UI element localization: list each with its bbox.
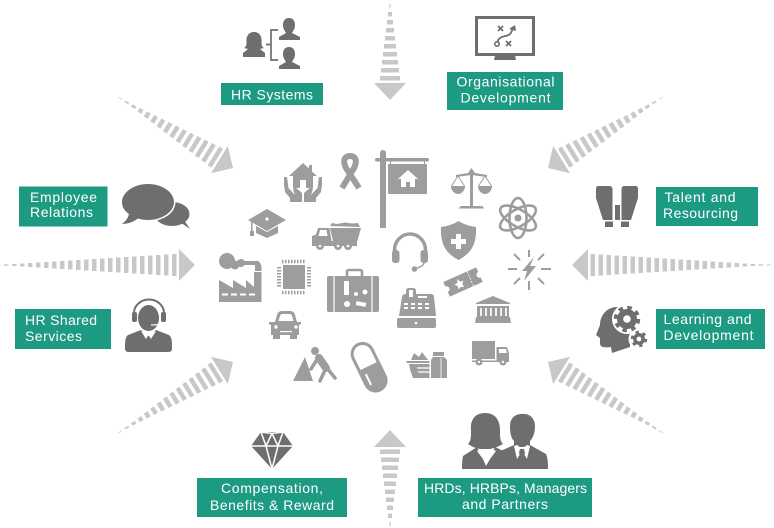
arrow: from right	[572, 249, 771, 281]
label: Talent and Resourcing: Talent and	[664, 189, 736, 205]
icon: HR systems organisation people	[243, 18, 300, 69]
arrow: from left	[0, 249, 195, 281]
icon: property sign	[375, 150, 429, 228]
label: Compensation, Benefits & Reward: Benefits & Reward	[210, 497, 334, 513]
icon: binoculars	[596, 186, 638, 227]
icon: suitcase with stickers	[327, 270, 379, 312]
icon: road worker digging	[293, 347, 335, 381]
icon: graduation cap	[248, 209, 286, 238]
label: Talent and Resourcing: Resourcing	[663, 205, 738, 221]
icon: factory	[219, 253, 262, 302]
label: Employee Relations: Employee	[30, 189, 97, 205]
icon: lightning spark	[508, 250, 551, 290]
label: Learning and Development	[656, 309, 765, 349]
arrow: from bottom right	[540, 348, 671, 447]
icon: speech bubbles	[120, 182, 190, 229]
icon: dump truck	[312, 222, 361, 250]
label: Learning and Development: Development	[664, 327, 754, 343]
arrow: from top left	[110, 83, 241, 182]
icon: hands holding house	[284, 163, 322, 202]
label: HRDs, HRBPs, Managers and Partners: and Partners	[462, 496, 548, 512]
label: Employee Relations: Relations	[30, 204, 93, 220]
label: HRDs, HRBPs, Managers and Partners	[418, 478, 592, 517]
label: HR Systems: HR Systems	[231, 86, 313, 102]
label: HRDs, HRBPs, Managers and Partners: HRDs, HRBPs, Managers	[424, 480, 587, 496]
icon: shopping basket and carton	[406, 352, 447, 378]
icon: call centre agent	[125, 300, 172, 352]
icon: strategy on monitor	[475, 18, 535, 60]
label: Learning and Development: Learning and	[664, 311, 752, 327]
label: HR Systems	[221, 83, 323, 105]
label: Organisational Development: Development	[460, 90, 551, 106]
icon: ticket	[443, 267, 483, 297]
label: Organisational Development	[447, 72, 563, 110]
label: Compensation, Benefits & Reward	[197, 478, 347, 517]
arrow: from bottom	[374, 430, 406, 526]
label: HR Shared Services: HR Shared	[25, 312, 97, 328]
icon: scales of justice	[451, 168, 492, 208]
label: Compensation, Benefits & Reward: Compensation,	[221, 480, 323, 496]
label: HR Shared Services: Services	[25, 328, 82, 344]
icon: cash register	[397, 288, 436, 328]
label: Organisational Development: Organisational	[456, 74, 554, 90]
arrow: from bottom left	[110, 348, 241, 447]
icon: delivery truck	[472, 341, 509, 366]
icon: diamond	[251, 432, 293, 469]
label: HR Shared Services	[15, 309, 111, 349]
panel: central sector icons	[219, 150, 551, 397]
icon: pill capsule	[347, 339, 392, 397]
label: Employee Relations	[19, 186, 108, 226]
arrow: from top	[374, 4, 406, 100]
label: Talent and Resourcing	[656, 187, 758, 226]
icon: car	[269, 311, 301, 339]
icon: medical shield	[441, 221, 476, 260]
icon: man and woman silhouettes	[462, 413, 548, 469]
icon: microchip	[279, 262, 309, 292]
icon: bank building	[475, 296, 511, 323]
icon: awareness ribbon	[342, 156, 359, 188]
icon: head with gears	[596, 304, 650, 353]
icon: headphones	[392, 234, 428, 272]
arrow: from top right	[540, 83, 671, 182]
icon: atom	[496, 198, 540, 238]
